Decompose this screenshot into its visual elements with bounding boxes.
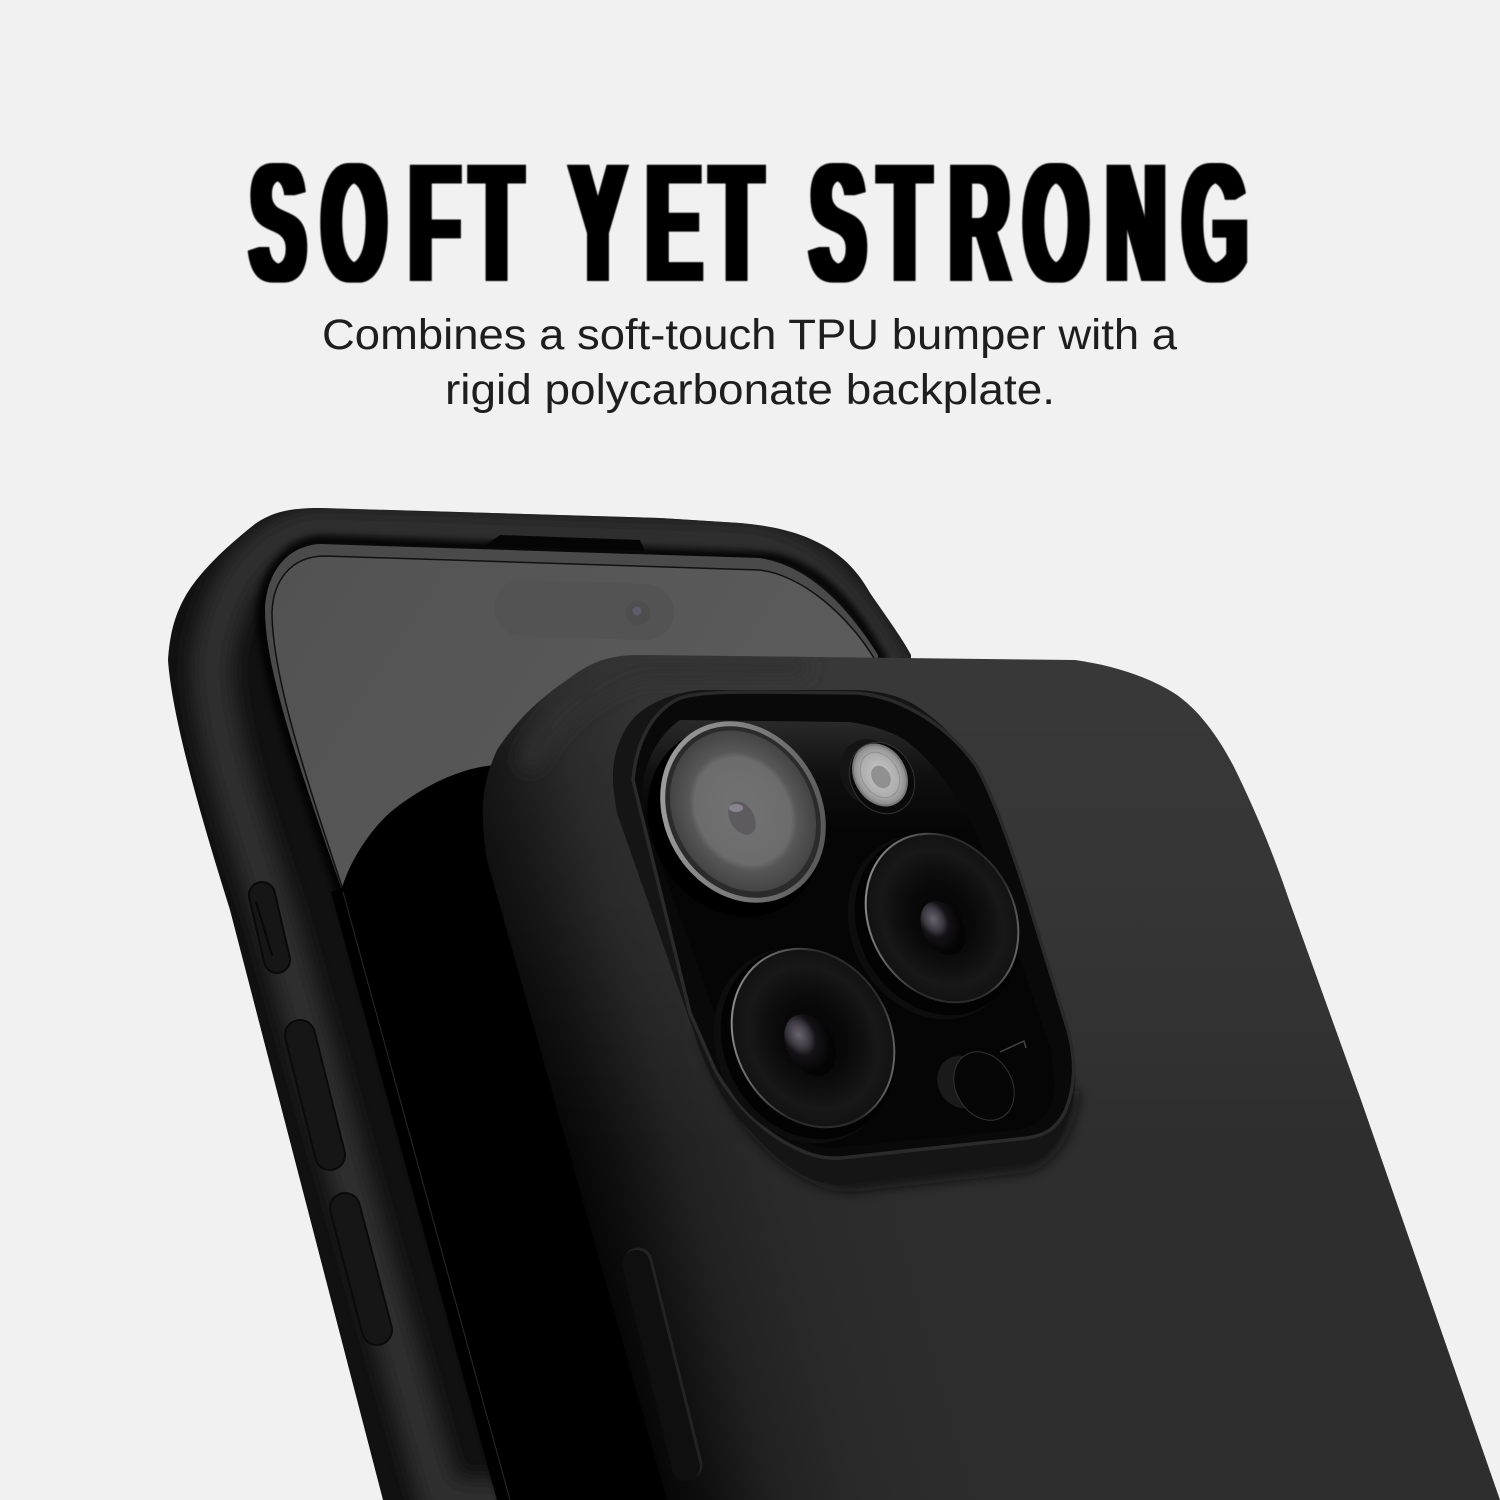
soft case body	[470, 640, 1500, 1500]
camera ridge and ring	[633, 692, 1074, 1158]
volume up button	[300, 1035, 330, 1155]
subtitle: rigid polycarbonate backplate.	[445, 366, 1055, 414]
top speaker notch	[484, 535, 645, 551]
dynamic island	[493, 579, 675, 641]
case bumper	[168, 508, 911, 1500]
camera island shadow	[700, 1030, 1080, 1192]
screen bezel	[265, 544, 885, 1500]
front phone in case	[168, 508, 911, 1500]
back phone in case	[470, 640, 1500, 1500]
title: SOFT YET STRONG	[250, 130, 1247, 318]
glass edge line	[343, 892, 510, 1500]
right lens	[815, 804, 1052, 1050]
side button	[636, 1262, 688, 1467]
main lens top-left	[613, 694, 857, 949]
camera plate	[642, 720, 1054, 1148]
screen glass	[272, 556, 885, 1500]
bottom lens	[679, 916, 929, 1176]
black shadow area	[331, 760, 700, 1500]
camera outer lip	[613, 690, 1076, 1185]
mute switch	[256, 895, 277, 960]
subtitle	[322, 311, 1177, 414]
flash	[828, 728, 927, 826]
front camera	[626, 601, 650, 625]
subtitle: Combines a soft-touch TPU bumper with a	[322, 311, 1177, 359]
volume down button	[345, 1208, 377, 1330]
microphone and sensor	[928, 1041, 1026, 1131]
